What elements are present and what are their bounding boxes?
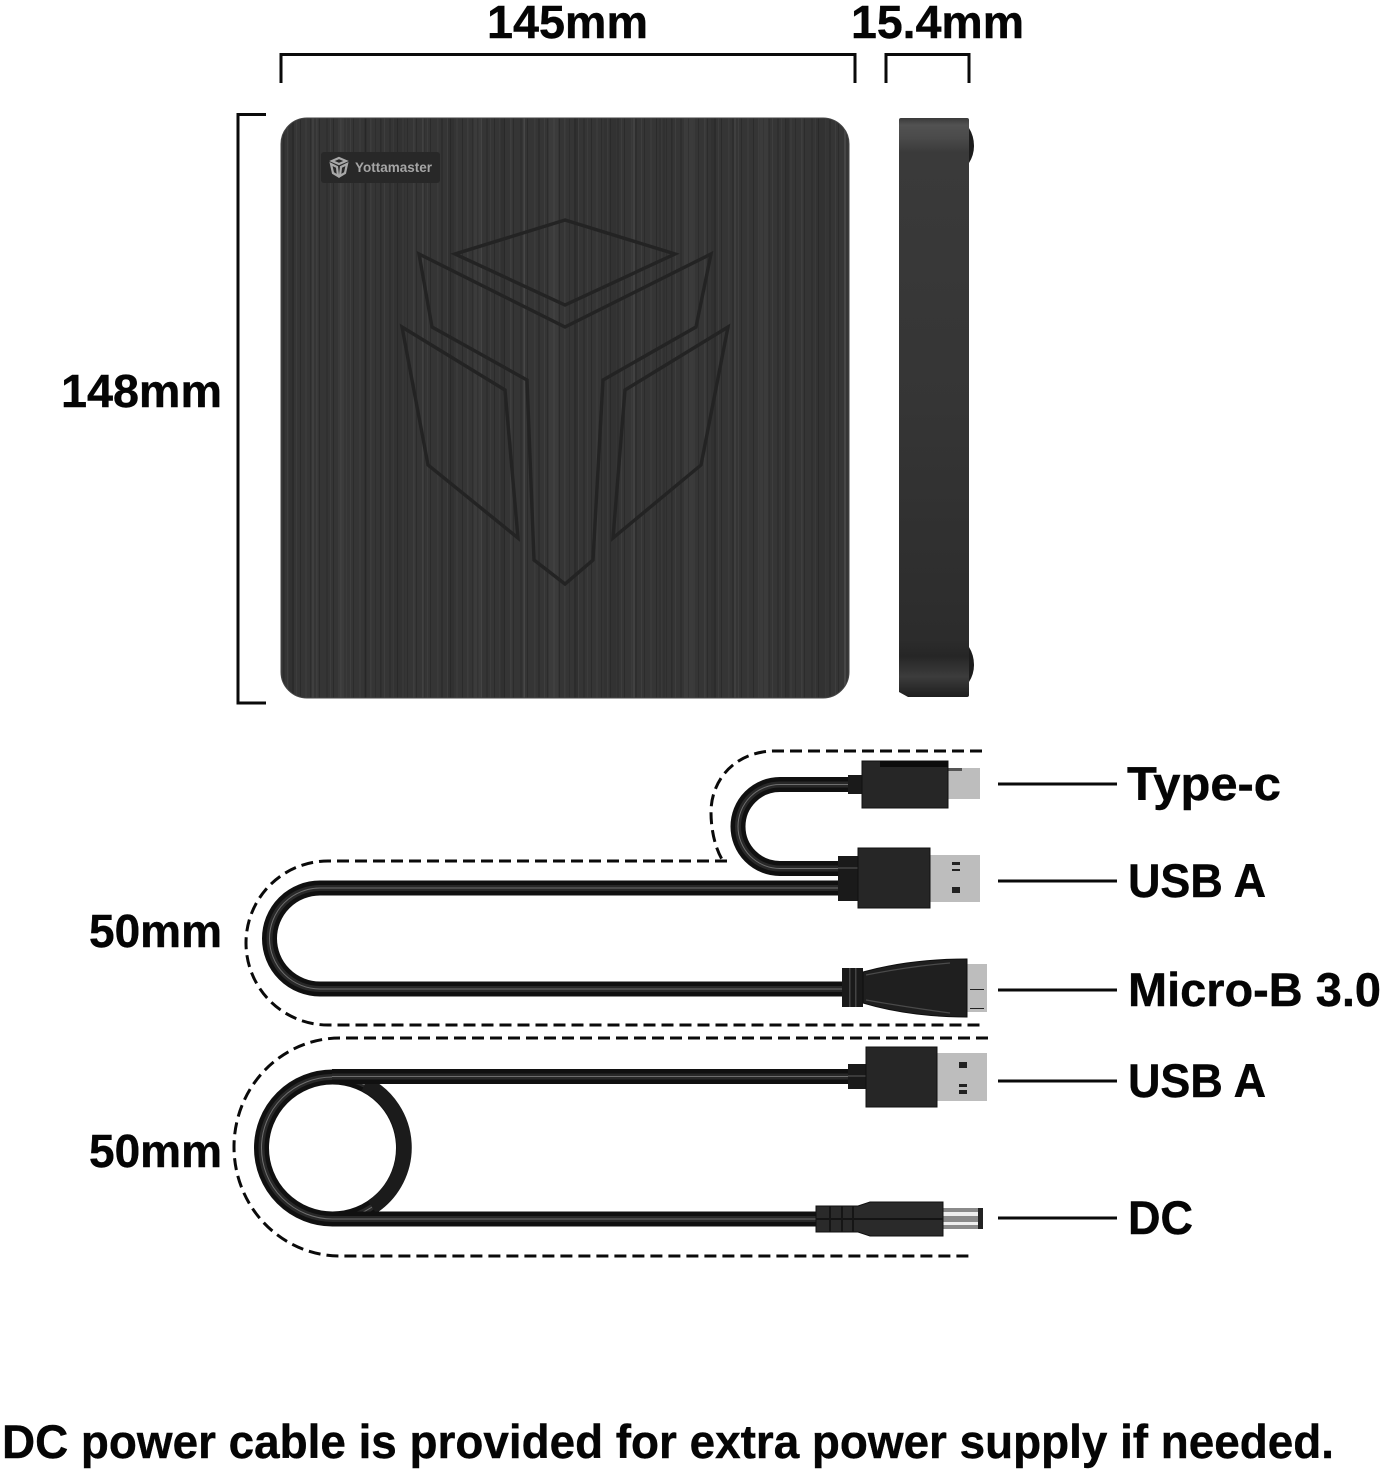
connector: DC barrel plug [816,1202,983,1236]
brand badge [321,152,440,183]
callout: USB A upper: USB A [1128,854,1266,907]
dimension: thickness 15.4mm [851,0,1024,83]
connector: Type-c [848,761,980,808]
engraved cube logo [402,220,728,584]
brushed enclosure panel [281,118,849,698]
dimension: height 148mm [61,114,266,703]
dimension: width 145mm [281,0,855,83]
callout: USB A lower: USB A [1128,1054,1266,1107]
device: side view [899,118,974,697]
connector: USB A upper [838,848,980,908]
icon: brand cube [331,158,347,176]
dimension: height 148mm: 148mm [61,365,222,417]
callout: Micro-B 3.0: Micro-B 3.0 [1128,963,1381,1016]
connector: USB A lower [848,1047,987,1107]
cable: power cable loop [262,1076,850,1219]
footnote: DC power cable is provided for extra power supply if needed. [2,1415,1334,1468]
device: top view [281,118,849,698]
dashed bracket: upper cable short branch [711,751,982,861]
callout: Type-c: Type-c [1127,757,1281,810]
cable length label: data cable: 50mm [89,905,222,957]
cable length label: power cable: 50mm [89,1125,222,1177]
callout: DC: DC [1128,1191,1193,1244]
brand badge: Yottamaster [355,160,433,175]
connector: Micro-B 3.0 [842,959,987,1017]
dashed bracket: data cable length [246,861,982,1025]
cable: Y data cable [270,784,850,989]
dashed bracket: power cable length [234,1038,988,1256]
